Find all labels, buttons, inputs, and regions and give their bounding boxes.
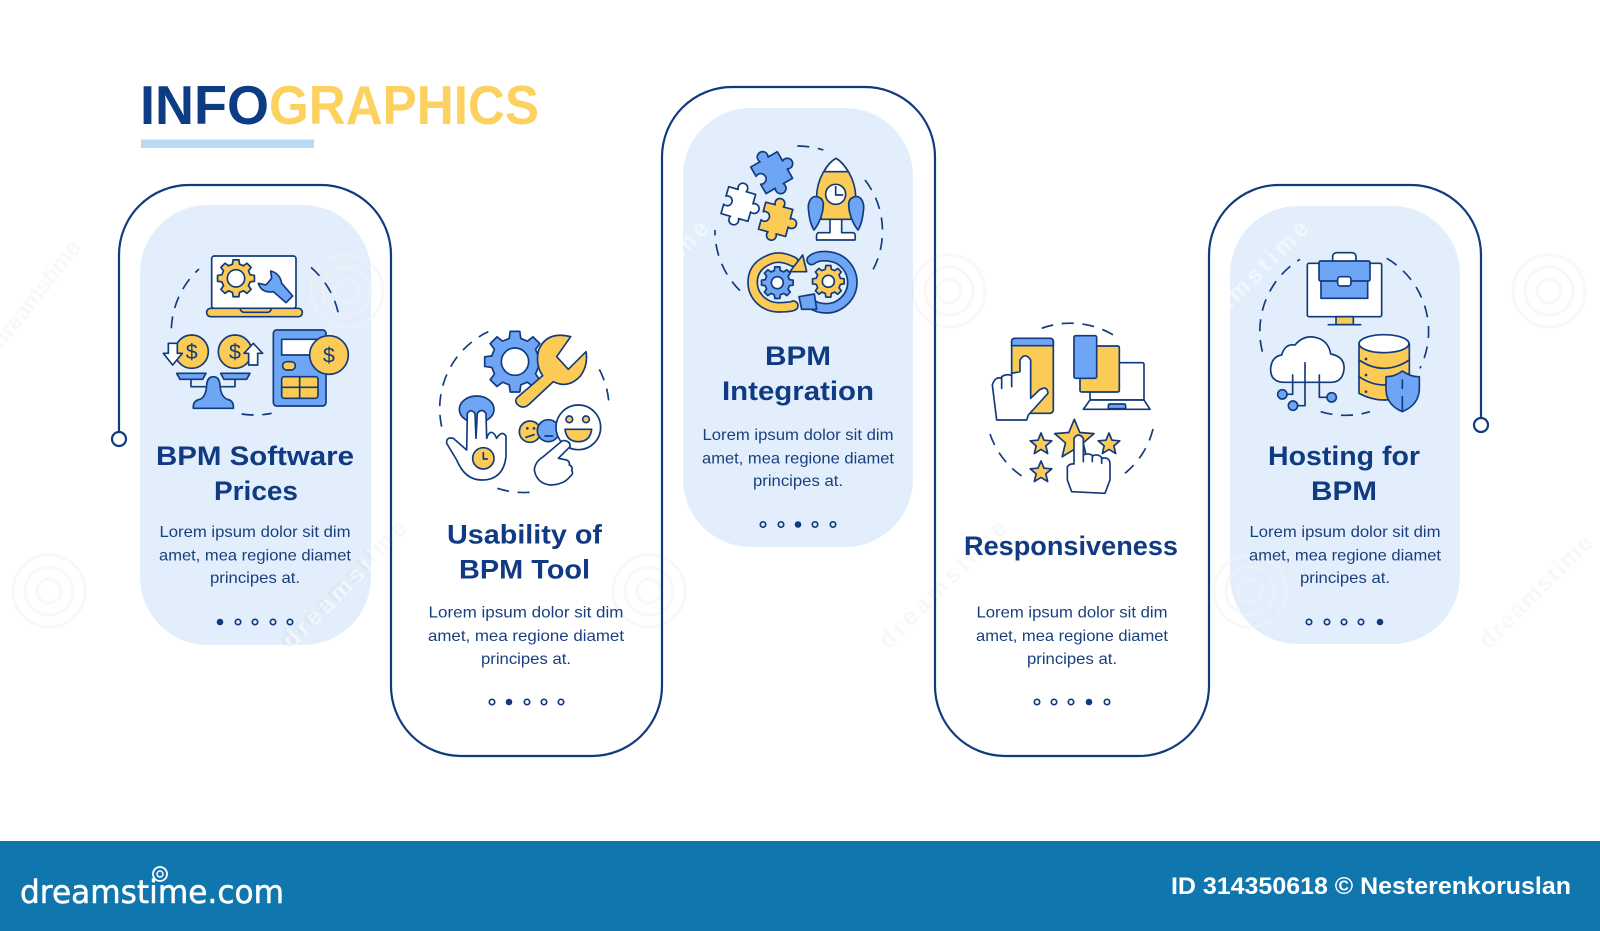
text: dreamstime	[277, 515, 416, 654]
body text: principes at.	[1027, 651, 1117, 668]
body text	[159, 524, 352, 587]
icon: software prices: $	[323, 344, 335, 368]
panel: card 5 background	[1230, 206, 1460, 644]
panel: card 3 background	[683, 108, 913, 547]
heading: Usability of	[447, 520, 603, 550]
body text	[702, 427, 895, 490]
footer logo text: dreamstime.com	[20, 873, 284, 911]
heading: BPM	[1311, 476, 1377, 506]
body text: amet, mea regione diamet	[1249, 548, 1442, 564]
heading	[447, 520, 603, 584]
title underline	[141, 140, 314, 148]
icon: software prices: $	[229, 340, 241, 364]
heading: Responsiveness	[964, 531, 1178, 561]
heading: Integration	[722, 376, 874, 406]
progress dots	[760, 521, 836, 528]
heading: Hosting for	[1268, 441, 1421, 471]
body text: amet, mea regione diamet	[428, 628, 625, 645]
text: dreamstime	[575, 215, 714, 354]
progress dots	[217, 619, 293, 625]
heading	[156, 441, 354, 506]
heading: BPM Software	[156, 441, 354, 471]
body text	[428, 604, 625, 668]
body text: Lorem ipsum dolor sit dim	[160, 524, 350, 541]
card 4: Responsiveness	[964, 323, 1178, 705]
body text	[976, 604, 1169, 668]
body text: Lorem ipsum dolor sit dim	[1250, 524, 1440, 541]
footer image id and author: ID 314350618 © Nesterenkoruslan	[1171, 873, 1571, 900]
icon: responsiveness	[990, 323, 1154, 493]
body text	[1249, 524, 1442, 587]
heading: BPM	[765, 341, 831, 371]
card 1: BPM Software Prices	[156, 256, 354, 625]
body text: principes at.	[481, 651, 571, 668]
body text: Lorem ipsum dolor sit dim	[976, 604, 1168, 622]
connector outline running through all five cards	[119, 87, 1481, 756]
body text: Lorem ipsum dolor sit dim	[428, 604, 624, 622]
progress dots	[1034, 699, 1110, 705]
icon: software prices	[163, 256, 348, 415]
text: dreamstime	[1473, 529, 1598, 654]
title: INFOGRAPHICS	[140, 74, 539, 136]
footer band	[0, 841, 1600, 931]
progress dots	[489, 699, 564, 705]
panel: card 1 background	[140, 205, 371, 645]
body text: principes at.	[753, 473, 843, 490]
connector end circle	[1474, 418, 1488, 432]
body text: amet, mea regione diamet	[976, 628, 1169, 645]
text: dreamstime	[273, 515, 412, 654]
icon: software prices: $	[186, 340, 198, 364]
body text: principes at.	[1300, 570, 1390, 587]
text: dreamstime	[1175, 215, 1314, 354]
heading: Prices	[214, 476, 298, 506]
card 5: Hosting for BPM	[1249, 253, 1442, 625]
card 3: BPM Integration	[702, 141, 895, 528]
title: INFOGRAPHICS: INFO	[140, 74, 269, 136]
progress dots	[1306, 619, 1383, 625]
icon: usability	[440, 331, 609, 493]
body text: amet, mea regione diamet	[159, 548, 352, 564]
card 2: Usability of BPM Tool	[428, 331, 625, 705]
icon: hosting	[1260, 253, 1429, 415]
heading: BPM Tool	[459, 554, 590, 584]
text: dreamstime	[873, 515, 1012, 654]
connector start circle	[112, 432, 126, 446]
body text: amet, mea regione diamet	[702, 450, 895, 468]
body text: Lorem ipsum dolor sit dim	[702, 427, 894, 444]
heading	[722, 341, 874, 406]
heading	[1268, 441, 1421, 506]
body text: principes at.	[210, 570, 300, 587]
icon: integration	[715, 141, 883, 309]
title: INFOGRAPHICS: GRAPHICS	[269, 74, 539, 136]
